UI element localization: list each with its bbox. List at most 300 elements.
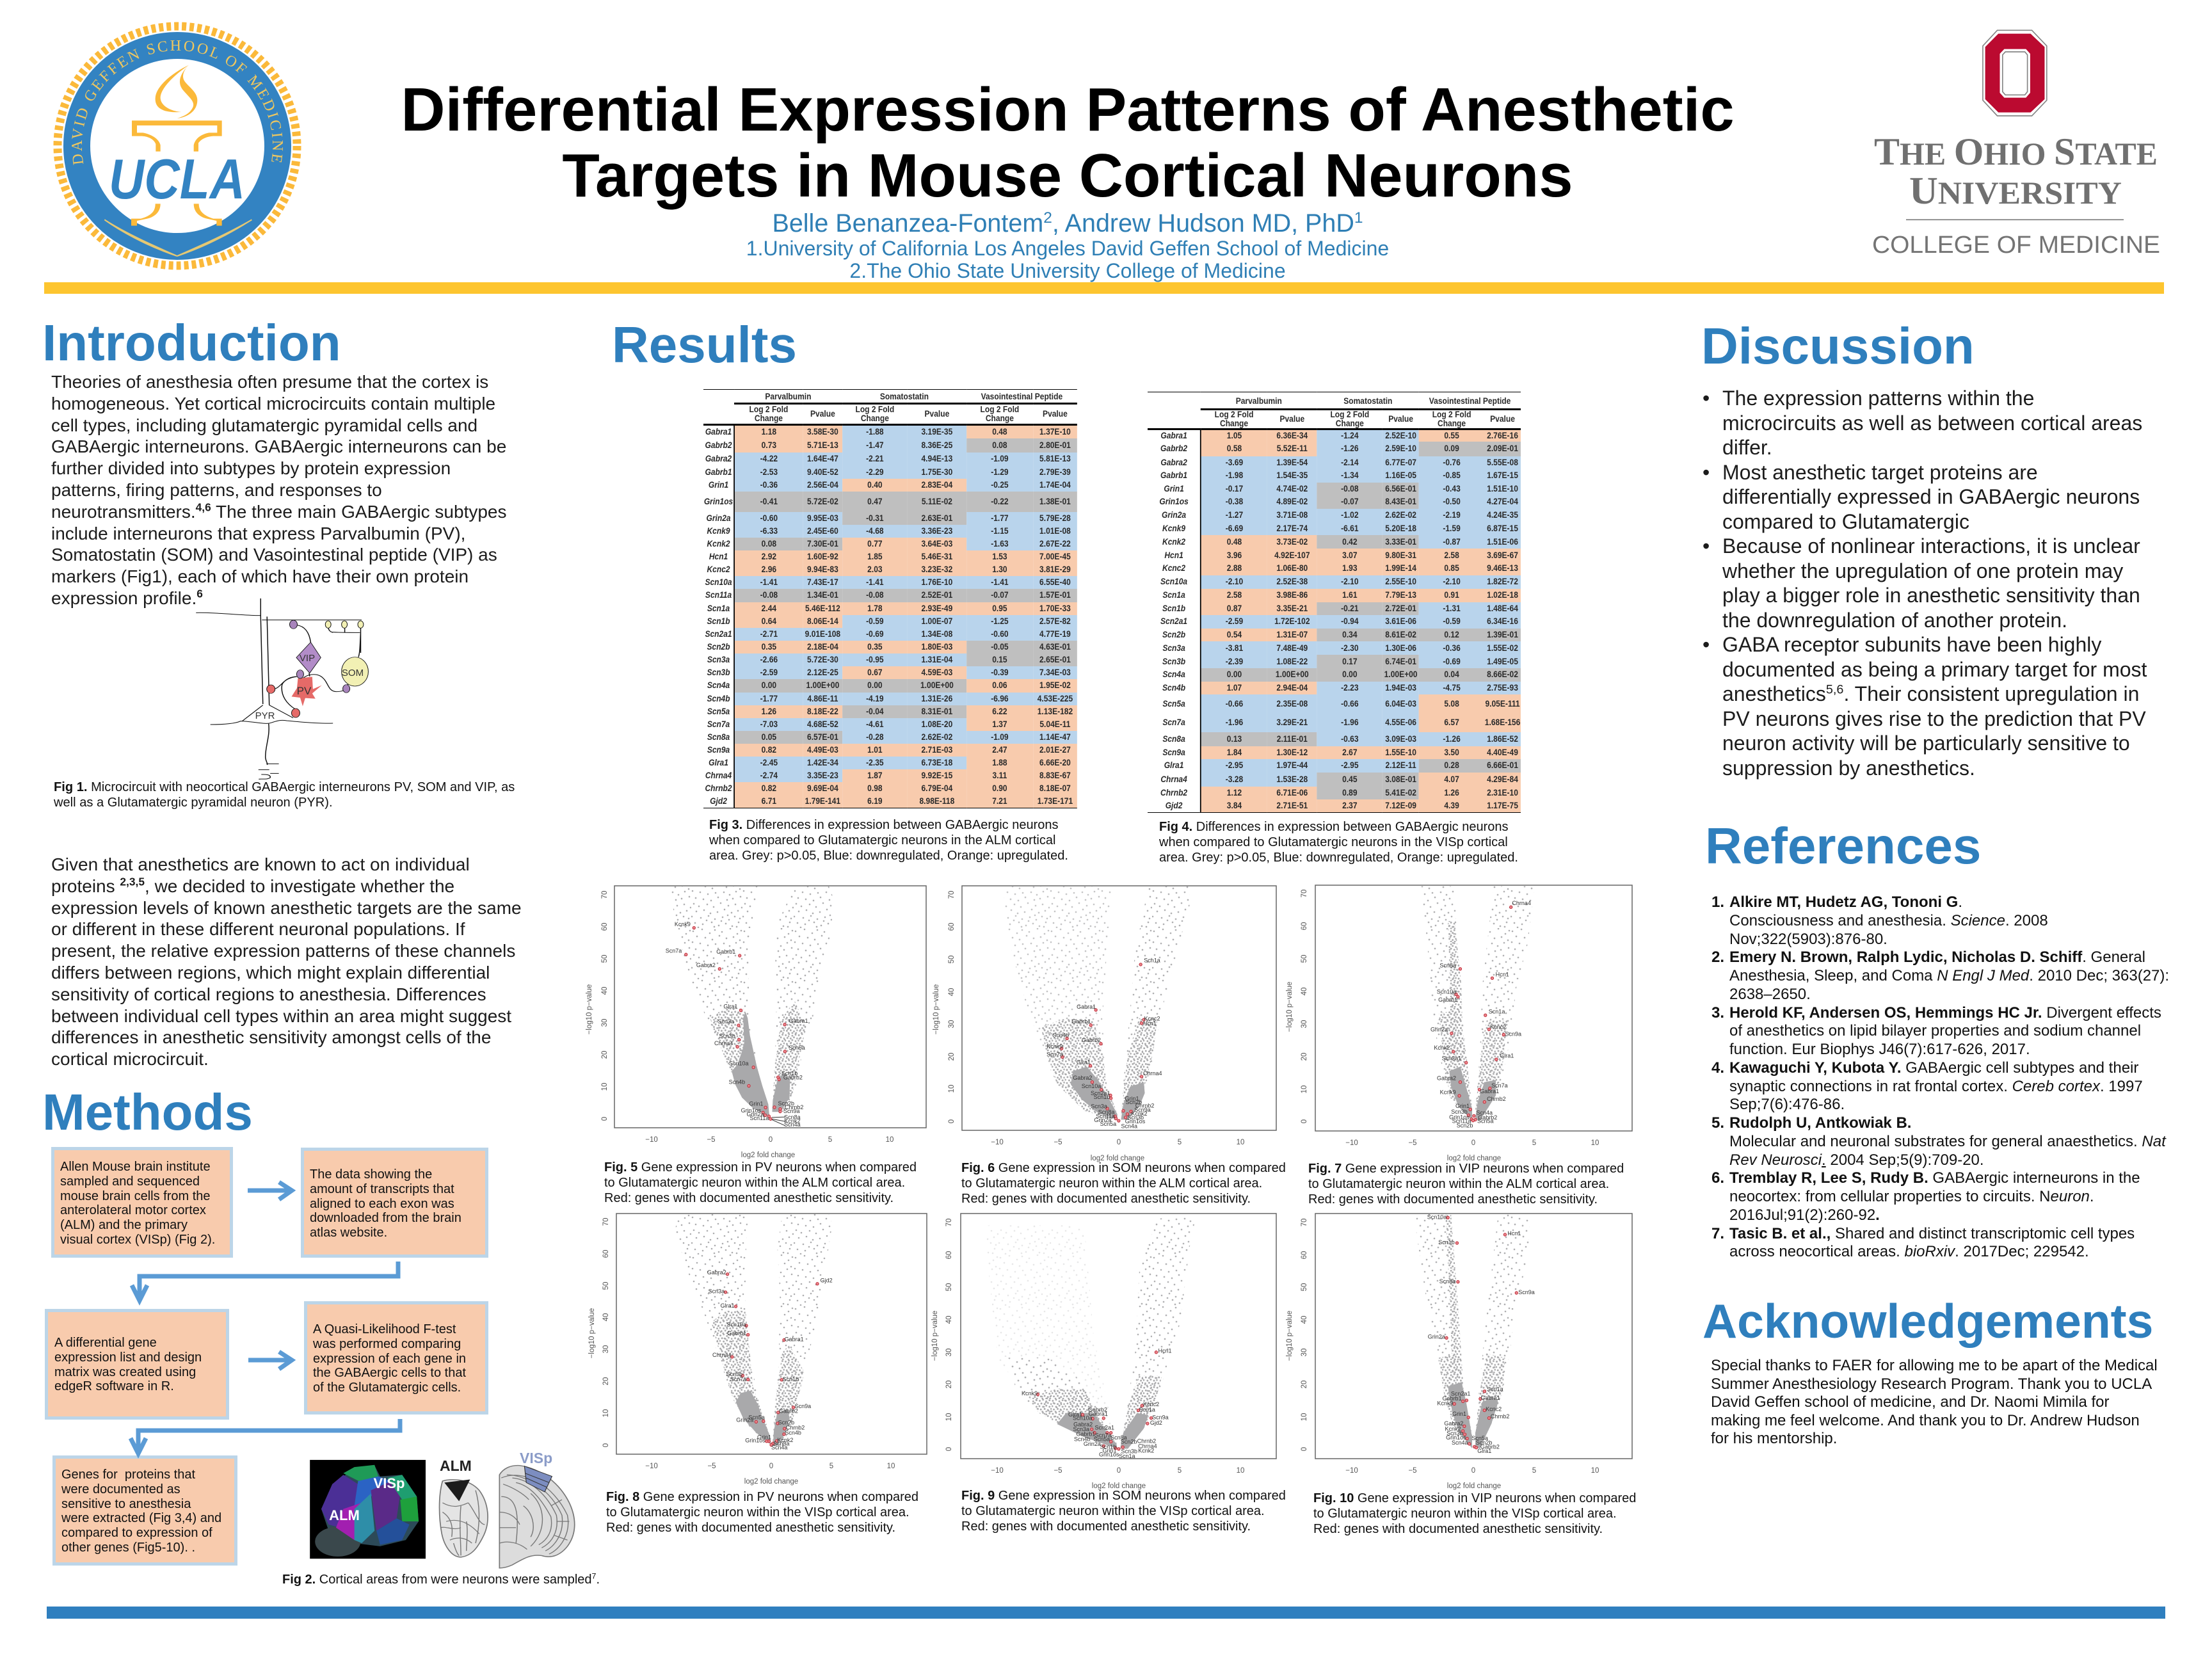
table: Fig 3 ALM differential expression: 1.37 [992,719,1007,728]
volcano plot: Fig 6: −5 [1054,1139,1062,1146]
volcano plot: Fig 7: 5 [1532,1139,1536,1147]
volcano plot: Fig 5: log2 fold change [741,1151,795,1159]
table: Fig 4 VISp differential expression: 1.86E-52 [1487,733,1518,744]
volcano plot: Fig 5: Chrna4 [714,1040,733,1046]
volcano plot: Fig 6: 10 [1237,1139,1244,1146]
volcano plot: Fig 8: 30 [602,1345,610,1353]
text block: references list: Consciousness and anesthesia. Science. 2008 [1729,912,2048,929]
table: Fig 4 VISp differential expression: 1.93 [1342,563,1358,573]
table: Fig 3 ALM differential expression: Log 2 Fold [981,405,1019,414]
volcano plot: Fig 5: Scn10a [729,1061,749,1067]
methods step 3: expression list and design [54,1350,202,1365]
volcano plot: Fig 6: Chrna4 [1143,1070,1162,1077]
table: Fig 4 VISp differential expression: 1.82E-72 [1487,577,1518,586]
text block: discussion bullets: Most anesthetic target proteins are [1722,461,2038,484]
table: Fig 4 VISp differential expression: -1.27 [1226,510,1243,520]
caption: figure 10: Red: genes with documented anesthetic sensitivity. [1313,1522,1603,1536]
table: Fig 3 ALM differential expression: Chrnb2 [705,783,732,793]
volcano plot: Fig 9: Gabrb2 [1088,1406,1107,1413]
volcano plot: Fig 8: −5 [707,1463,716,1470]
volcano plot: Fig 9: Grin1os [1099,1451,1119,1457]
volcano plot: Fig 7: Kcnk9 [1440,1089,1456,1096]
volcano plot: Fig 9: Grin1 [1103,1448,1117,1454]
table: Fig 3 ALM differential expression: 3.11 [993,771,1007,780]
table: Fig 3 ALM differential expression: -4.61 [866,719,884,728]
text block: rationale [51,854,522,1069]
table: Fig 4 VISp differential expression: -2.10 [1226,577,1243,586]
table: Fig 4 VISp differential expression: 5.52E-11 [1277,444,1308,453]
volcano plot: Fig 9: Glra1 [1068,1411,1082,1418]
caption: figure 5: to Glutamatergic neuron within the ALM cortical area. [604,1176,905,1190]
volcano plot: Fig 9: Scn3a [1073,1426,1089,1432]
table: Fig 4 VISp differential expression: Vasointestinal Peptide [1429,396,1511,406]
table: Fig 3 ALM differential expression: -4.22 [760,454,778,463]
table: Fig 4 VISp differential expression: 1.39E-54 [1276,458,1308,467]
table: Fig 4 VISp differential expression: 3.71E-08 [1276,510,1308,520]
table: Fig 3 ALM differential expression: 8.18E-22 [807,707,838,716]
table: Fig 4 VISp differential expression: 1.61 [1342,590,1358,600]
affiliations: 2.The Ohio State University College of Medicine [849,259,1286,282]
volcano plot: Fig 9: −10 [991,1467,1004,1475]
table: Fig 3 ALM differential expression [703,389,1077,808]
volcano plot: Fig 5: Gabra2 [696,962,716,968]
table: Fig 4 VISp differential expression: 3.98E-86 [1276,590,1308,600]
table: Fig 3 ALM differential expression: Vasointestinal Peptide [981,392,1062,401]
table: Fig 3 ALM differential expression: 1.37E-10 [1039,427,1071,437]
table: Fig 4 VISp differential expression: Scn8a [1162,733,1185,744]
volcano plot: Fig 8: Gabra2 [707,1269,726,1276]
table: Fig 4 VISp differential expression: 2.55E-10 [1385,577,1416,586]
table: Fig 4 VISp differential expression: 4.40E-49 [1487,748,1518,757]
table: Fig 4 VISp differential expression: -0.08 [1341,484,1359,493]
methods step 4: A Quasi-Likelihood F-test [313,1322,456,1336]
table: Fig 3 ALM differential expression: 6.73E-18 [921,758,952,767]
table: Fig 4 VISp differential expression: 4.89E-02 [1276,497,1308,506]
table: Fig 3 ALM differential expression: -0.08 [866,590,884,600]
table: Fig 4 VISp differential expression: -1.96 [1226,717,1243,727]
table: Fig 4 VISp differential expression: -0.76 [1443,458,1461,467]
table: Fig 4 VISp differential expression: 0.58 [1227,444,1242,453]
table: Fig 3 ALM differential expression: 5.46E-31 [921,552,952,561]
volcano plot: Fig 5: 70 [601,891,609,899]
table: Fig 3 ALM differential expression: 1.31E-26 [921,694,952,703]
volcano plot: Fig 6: Scn2b [1126,1099,1142,1105]
text block: discussion bullets: The expression patterns within the [1722,387,2034,410]
volcano plot: Fig 5: Gabrb1 [716,949,735,955]
table: Fig 3 ALM differential expression: 1.80E-03 [921,642,952,652]
table: Fig 3 ALM differential expression: 2.03 [867,565,883,573]
table: Fig 4 VISp differential expression: Gabra2 [1160,458,1187,467]
table: Fig 4 VISp differential expression: -2.23 [1341,683,1359,693]
volcano plot: Fig 8: Scn4b [785,1430,801,1436]
volcano plot: Fig 8: −10 [645,1463,658,1470]
volcano plot: Fig 7: Scn1a [1489,1008,1505,1014]
table: Fig 3 ALM differential expression: 3.58E-30 [807,427,838,437]
caption: figure 10 [1313,1491,1636,1536]
table: Fig 3 ALM differential expression: Change [861,413,889,423]
caption: figure 3 [709,818,1068,863]
table: Fig 4 VISp differential expression: 1.00E+00 [1276,669,1309,679]
table: Fig 3 ALM differential expression: 3.19E-35 [921,427,952,437]
table: Fig 4 VISp differential expression: 3.33E-01 [1385,536,1416,547]
table: Fig 4 VISp differential expression: Scn3a [1162,643,1185,653]
volcano plot: Fig 8: Scn3b [726,1371,742,1377]
table: Fig 3 ALM differential expression: 1.53 [992,552,1007,561]
table: Fig 4 VISp differential expression: -1.24 [1341,431,1359,440]
volcano plot: Fig 10: 70 [1301,1219,1308,1226]
table: Fig 3 ALM differential expression: 6.79E-04 [921,783,952,793]
heading: Methods: Methods [42,1084,253,1141]
table: Fig 3 ALM differential expression: 9.01E-108 [805,629,840,639]
table: Fig 4 VISp differential expression: -0.85 [1443,470,1461,480]
methods step 3 [45,1309,229,1420]
volcano plot: Fig 7: Scn2b [1457,1123,1473,1129]
table: Fig 4 VISp differential expression: 5.08 [1444,699,1459,709]
volcano plot: Fig 6: 70 [948,891,956,899]
table: Fig 3 ALM differential expression: 4.63E-01 [1039,642,1071,652]
text block: discussion bullets: suppression by anesthetics. [1722,757,1975,780]
table: Fig 4 VISp differential expression: -0.66 [1226,699,1243,709]
table: Fig 4 VISp differential expression: 3.35E-21 [1276,604,1308,613]
table: Fig 4 VISp differential expression: 2.09E-01 [1487,444,1518,453]
table: Fig 3 ALM differential expression: -0.95 [866,655,884,664]
table: Fig 3 ALM differential expression: Glra1 [709,758,728,767]
volcano plot: Fig 8: Grin2a [736,1417,753,1423]
table: Fig 3 ALM differential expression: Scn9a [707,745,730,754]
table: Fig 4 VISp differential expression: 1.06E-80 [1276,563,1308,573]
table: Fig 4 VISp differential expression: -6.69 [1226,524,1243,533]
caption: figure 4: when compared to Glutamatergic neurons in the VISp cortical [1159,835,1508,849]
volcano plot: Fig 8: 0 [602,1443,610,1447]
table: Fig 4 VISp differential expression: 0.89 [1342,788,1358,797]
arrow: step 2 to step 3 [132,1262,398,1301]
volcano plot: Fig 7: Chrnb2 [1487,1096,1506,1102]
table: Fig 3 ALM differential expression: 6.22 [992,707,1007,716]
volcano plot: Fig 5: Scn8a [784,1114,801,1121]
volcano plot: Fig 8 [588,1214,927,1486]
table: Fig 4 VISp differential expression: -2.59 [1226,616,1243,626]
volcano plot: Fig 9: −5 [1054,1467,1062,1475]
text block: references list: Sep;7(6):476-86. [1729,1096,1845,1113]
table: Fig 3 ALM differential expression: 5.72E-02 [807,497,838,506]
methods step 4: expression of each gene in [313,1352,466,1366]
text block: acknowledgements: for his mentorship. [1711,1430,1837,1447]
volcano plot: Fig 9: 0 [945,1447,953,1451]
volcano plot: Fig 6: Scn4a [1121,1123,1137,1130]
caption: figure 8: Fig. 8 Gene expression in PV neurons when compared [606,1490,918,1504]
caption: figure 9: to Glutamatergic neuron within the VISp cortical area. [961,1504,1265,1518]
table: Fig 3 ALM differential expression: 1.34E-01 [807,590,838,600]
table: Fig 3 ALM differential expression: -1.09 [991,732,1009,741]
table: Fig 4 VISp differential expression: 4.92E-107 [1274,550,1310,559]
figure 1: neocortical microcircuit diagram: SOM [342,668,364,678]
table: Fig 3 ALM differential expression: 0.00 [762,680,776,690]
logo: UCLA David Geffen School of Medicine seal: UCLA [109,147,245,211]
volcano plot: Fig 10: 30 [1301,1349,1308,1356]
volcano plot: Fig 6: Scn8a [1098,1109,1114,1116]
volcano plot: Fig 10: Scn8a [1439,1278,1455,1285]
table: Fig 3 ALM differential expression: 0.82 [762,745,776,754]
table: Fig 3 ALM differential expression: 1.00E+00 [920,680,954,690]
table: Fig 3 ALM differential expression: -2.21 [866,454,884,463]
table: Fig 3 ALM differential expression: 3.36E-23 [921,526,952,535]
table: Fig 3 ALM differential expression: -1.41 [866,577,884,586]
volcano plot: Fig 5: 40 [601,987,609,995]
table: Fig 4 VISp differential expression: -1.26 [1443,733,1461,744]
volcano plot: Fig 5 [586,886,926,1159]
text block: rationale: differences in anesthetic sensitivity amongst cells of the [51,1027,491,1047]
volcano plot: Fig 8: Gabrb2 [779,1407,798,1414]
table: Fig 4 VISp differential expression: Change [1336,419,1364,428]
table: Fig 3 ALM differential expression: 0.35 [762,642,776,652]
table: Fig 4 VISp differential expression: -0.94 [1341,616,1359,626]
volcano plot: Fig 6: Kcnk9 [1046,1043,1062,1050]
table: Fig 4 VISp differential expression: 2.58 [1227,590,1242,600]
volcano plot: Fig 6: Kcnk2 [1131,1110,1148,1117]
volcano plot: Fig 5: 50 [601,955,609,963]
table: Fig 4 VISp differential expression: Parvalbumin [1236,396,1282,406]
volcano plot: Fig 8: 10 [887,1463,895,1470]
volcano plot: Fig 7 [1286,885,1632,1162]
table: Fig 3 ALM differential expression: 2.71E-03 [921,745,952,754]
volcano plot: Fig 6: Scn10a [1082,1083,1101,1089]
volcano plot: Fig 10: 10 [1591,1467,1599,1475]
methods step 5: other genes (Fig5-10). . [61,1541,195,1555]
text: • [1703,534,1710,557]
volcano plot: Fig 10: Scn1a [1487,1386,1503,1392]
table: Fig 4 VISp differential expression: 7.79E-13 [1385,590,1416,600]
table: Fig 3 ALM differential expression: -0.60 [760,513,778,522]
table: Fig 3 ALM differential expression: Scn2a1 [705,629,732,639]
table: Fig 4 VISp differential expression: 1.68E-156 [1485,717,1520,727]
text block: discussion bullets: differentially expressed in GABAergic neurons [1722,485,2140,508]
table: Fig 3 ALM differential expression: 0.48 [992,427,1007,437]
table: Fig 3 ALM differential expression: 4.77E-19 [1039,629,1071,639]
table: Fig 4 VISp differential expression: 1.08E-22 [1276,657,1308,666]
volcano plot: Fig 5: Kcnk9 [675,921,691,927]
volcano plot: Fig 7: 0 [1471,1139,1475,1147]
volcano plot: Fig 6: Scn1a [1144,958,1160,964]
caption: figure 7 [1308,1162,1624,1206]
caption: figure 1 [54,780,515,810]
text block: references list: neocortex: from cellular properties to circuits. Neuron. [1729,1188,2094,1205]
volcano plot: Fig 8: log2 fold change [744,1478,798,1486]
volcano plot: Fig 9: Scn4b [1074,1436,1090,1443]
table: Fig 3 ALM differential expression: 4.49E-03 [807,745,838,754]
table: Fig 4 VISp differential expression: 0.04 [1444,669,1459,679]
text block: rationale: expression levels of known anesthetic targets are the same [51,898,522,918]
volcano plot: Fig 8: 0 [769,1463,773,1470]
text block: references list: across neocortical areas. bioRxiv. 2017Dec; 229542. [1729,1243,2089,1260]
arrow: step 1 to step 2 [248,1182,292,1199]
table: Fig 3 ALM differential expression: Kcnk9 [707,526,730,535]
table: Fig 4 VISp differential expression: 1.31E-07 [1276,630,1308,639]
table: Fig 4 VISp differential expression: Scn9a [1162,748,1185,757]
volcano plot: Fig 5: Scn5a [789,1045,805,1051]
volcano plot: Fig 9: Scn8a [1110,1434,1127,1441]
table: Fig 4 VISp differential expression: -0.63 [1341,733,1359,744]
table: Fig 3 ALM differential expression: 2.52E-01 [921,590,952,600]
table: Fig 3 ALM differential expression: 9.92E-15 [921,771,952,780]
table: Fig 3 ALM differential expression: Scn1b [707,616,730,626]
volcano plot: Fig 6: Gabrb2 [1082,1037,1101,1043]
table: Fig 3 ALM differential expression: -1.77 [760,694,778,703]
title: Targets in Mouse Cortical Neurons [562,141,1573,210]
volcano plot: Fig 7: 40 [1301,988,1308,995]
table: Fig 4 VISp differential expression: 1.84 [1227,748,1242,757]
text block: rationale: cortical microcircuit. [51,1049,209,1069]
volcano plot: Fig 6: Hcn1 [1143,1020,1157,1027]
table: Fig 3 ALM differential expression: Somatostatin [880,392,929,401]
volcano plot: Fig 8: Scn9a [795,1403,811,1409]
volcano plot: Fig 7: 10 [1301,1086,1308,1093]
table: Fig 4 VISp differential expression: -0.50 [1443,497,1461,506]
table: Fig 3 ALM differential expression: -0.08 [760,590,778,600]
volcano plot: Fig 8: Scn3a [709,1288,725,1294]
table: Fig 4 VISp differential expression: 1.30E-06 [1385,643,1416,653]
table: Fig 4 VISp differential expression: 6.66E-01 [1487,760,1518,770]
table: Fig 4 VISp differential expression: 1.53E-28 [1276,774,1308,783]
table: Fig 3 ALM differential expression: Scn3a [707,655,730,664]
volcano plot: Fig 6: Scn3b [1128,1114,1144,1121]
volcano plot: Fig 8: 5 [830,1463,833,1470]
table: Fig 3 ALM differential expression: 1.34E-08 [921,629,952,639]
table: Fig 3 ALM differential expression: Grin2a [706,513,731,522]
table: Fig 3 ALM differential expression: -1.09 [991,454,1009,463]
table: Fig 4 VISp differential expression: Grin1os [1159,497,1189,506]
table: Fig 4 VISp differential expression: Kcnk2 [1162,536,1185,547]
table: Fig 3 ALM differential expression: 0.77 [867,539,883,548]
text block: acknowledgements: making me feel welcome. And thank you to Dr. Andrew Hudson [1711,1412,2140,1429]
caption: figure 10: Fig. 10 Gene expression in VIP neurons when compared [1313,1491,1636,1505]
table: Fig 3 ALM differential expression: 0.08 [992,440,1007,450]
table: Fig 4 VISp differential expression: Gabrb1 [1160,470,1187,480]
volcano plot: Fig 10: Kcnk9 [1437,1400,1453,1406]
table: Fig 3 ALM differential expression: -6.33 [760,526,778,535]
table: Fig 4 VISp differential expression: 2.71E-51 [1276,801,1308,810]
table: Fig 4 VISp differential expression: Gjd2 [1166,801,1182,810]
table: Fig 3 ALM differential expression: Gabrb2 [705,440,732,450]
caption: figure 1: well as a Glutamatergic pyramidal neuron (PYR). [54,796,333,810]
table: Fig 3 ALM differential expression: 6.57E-01 [807,732,838,741]
authors: Belle Benanzea-Fontem2, Andrew Hudson MD, PhD1 [772,209,1363,237]
table: Fig 3 ALM differential expression: Pvalue [1043,409,1068,419]
volcano plot: Fig 5: Scn7a [666,948,682,954]
table: Fig 4 VISp differential expression: -1.96 [1341,717,1359,727]
table: Fig 4 VISp differential expression: -0.43 [1443,484,1461,493]
heading: Results: Results [612,316,797,373]
table: Fig 3 ALM differential expression: 2.45E-60 [807,526,838,535]
volcano plot: Fig 8: Kcnk2 [777,1437,793,1443]
table: Fig 4 VISp differential expression: 4.29E-84 [1487,774,1518,783]
table: Fig 4 VISp differential expression: Hcn1 [1164,550,1183,559]
table: Fig 4 VISp differential expression: Scn1b [1162,604,1185,613]
table: Fig 3 ALM differential expression: 8.18E-07 [1039,783,1071,793]
text block: discussion bullets [1703,387,2147,780]
text block: discussion bullets: differ. [1722,436,1772,459]
volcano plot: Fig 6: 30 [948,1020,956,1028]
table: Fig 4 VISp differential expression: 6.36E-34 [1276,431,1308,440]
table: Fig 4 VISp differential expression: 1.72E-102 [1274,616,1310,626]
text block: references list: Alkire MT, Hudetz AG, Tononi G. [1729,894,1962,911]
table: Fig 4 VISp differential expression: 2.58 [1444,550,1459,559]
volcano plot: Fig 9: Scn1a [1119,1453,1135,1459]
volcano plot: Fig 10: 5 [1532,1467,1536,1475]
table: Fig 4 VISp differential expression: 1.94E-03 [1385,683,1416,693]
table: Fig 4 VISp differential expression: Pvalue [1279,414,1304,424]
table: Fig 3 ALM differential expression: 5.72E-30 [807,655,838,664]
text block: introduction: homogeneous. Yet cortical microcircuits contain multiple [51,394,495,413]
volcano plot: Fig 8: Scn2b [778,1419,794,1425]
text block: discussion bullets: play a bigger role in anesthetic sensitivity than [1722,584,2140,607]
caption: figure 6: Fig. 6 Gene expression in SOM neurons when compared [961,1161,1286,1175]
table: Fig 4 VISp differential expression: 0.42 [1342,536,1358,547]
table: Fig 4 VISp differential expression: 1.67E-15 [1487,470,1518,480]
table: Fig 4 VISp differential expression: 1.55E-10 [1385,748,1416,757]
volcano plot: Fig 10: Kcnc2 [1486,1406,1502,1413]
methods step 1: anterolateral motor cortex [60,1203,206,1217]
volcano plot: Fig 6: 5 [1178,1139,1182,1146]
table: Fig 4 VISp differential expression: 5.20E-18 [1385,524,1416,533]
table: Fig 3 ALM differential expression: 7.43E-17 [807,577,838,586]
table: Fig 4 VISp differential expression: Scn4a [1162,669,1185,679]
table: Fig 4 VISp differential expression: -0.59 [1443,616,1461,626]
volcano plot: Fig 7: Kcnc2 [1490,1023,1506,1030]
table: Fig 4 VISp differential expression: 0.34 [1342,630,1358,639]
table: Fig 4 VISp differential expression: 3.61E-06 [1385,616,1416,626]
table: Fig 4 VISp differential expression: 2.72E-01 [1385,604,1416,613]
table: Fig 3 ALM differential expression: 1.30 [992,565,1007,573]
methods step 2: aligned to each exon was [310,1197,454,1211]
table: Fig 4 VISp differential expression: 6.77E-07 [1385,458,1416,467]
table: Fig 3 ALM differential expression: -1.63 [991,539,1009,548]
table: Fig 3 ALM differential expression: 1.64E-47 [807,454,838,463]
table: Fig 3 ALM differential expression: 2.44 [762,604,776,613]
text block: references list: Kawaguchi Y, Kubota Y. GABAergic cell subtypes and their [1729,1059,2138,1077]
caption: figure 6: to Glutamatergic neuron within the ALM cortical area. [961,1176,1262,1190]
text block: discussion bullets: anesthetics5,6. Their consistent upregulation in [1722,682,2139,705]
volcano plot: Fig 10: Gabrb2 [1480,1443,1500,1450]
table: Fig 3 ALM differential expression: 0.35 [867,642,883,652]
table: Fig 4 VISp differential expression: 1.16E-05 [1385,470,1416,480]
table: Fig 3 ALM differential expression: 0.06 [992,680,1007,690]
table: Fig 3 ALM differential expression: 5.79E-28 [1039,513,1071,522]
methods step 2 [301,1148,488,1258]
volcano plot: Fig 7: Gabra2 [1437,1075,1456,1081]
caption: figure 9: Fig. 9 Gene expression in SOM neurons when compared [961,1489,1286,1503]
arrow: step 3 to step 4 [248,1352,292,1369]
methods step 4 [304,1301,488,1415]
title [401,76,1735,210]
volcano plot: Fig 10: Grin2a [1428,1333,1445,1340]
text block: introduction: cell types, including glutamatergic pyramidal cells and [51,415,477,435]
table: Fig 3 ALM differential expression: 1.73E-171 [1038,796,1073,806]
table: Fig 4 VISp differential expression: Scn3b [1162,657,1185,666]
volcano plot: Fig 10: Scn9a [1518,1289,1535,1295]
table: Fig 3 ALM differential expression: -2.74 [760,771,778,780]
table: Fig 4 VISp differential expression: 4.55E-06 [1385,717,1416,727]
table: Fig 4 VISp differential expression: 1.54E-35 [1276,470,1308,480]
table: Fig 4 VISp differential expression: 1.49E-05 [1487,657,1518,666]
text block: introduction: include interneurons that express Parvalbumin (PV), [51,524,465,543]
table: Fig 4 VISp differential expression: 0.00 [1342,669,1358,679]
table: Fig 3 ALM differential expression: 9.40E-52 [807,467,838,476]
table: Fig 3 ALM differential expression: 0.73 [762,440,776,450]
volcano plot: Fig 6: Scn5a [1100,1121,1116,1127]
volcano plot: Fig 5: Scn3b [719,1033,735,1039]
table: Fig 4 VISp differential expression: -1.26 [1341,444,1359,453]
table: Fig 3 ALM differential expression: 1.18 [762,427,776,437]
